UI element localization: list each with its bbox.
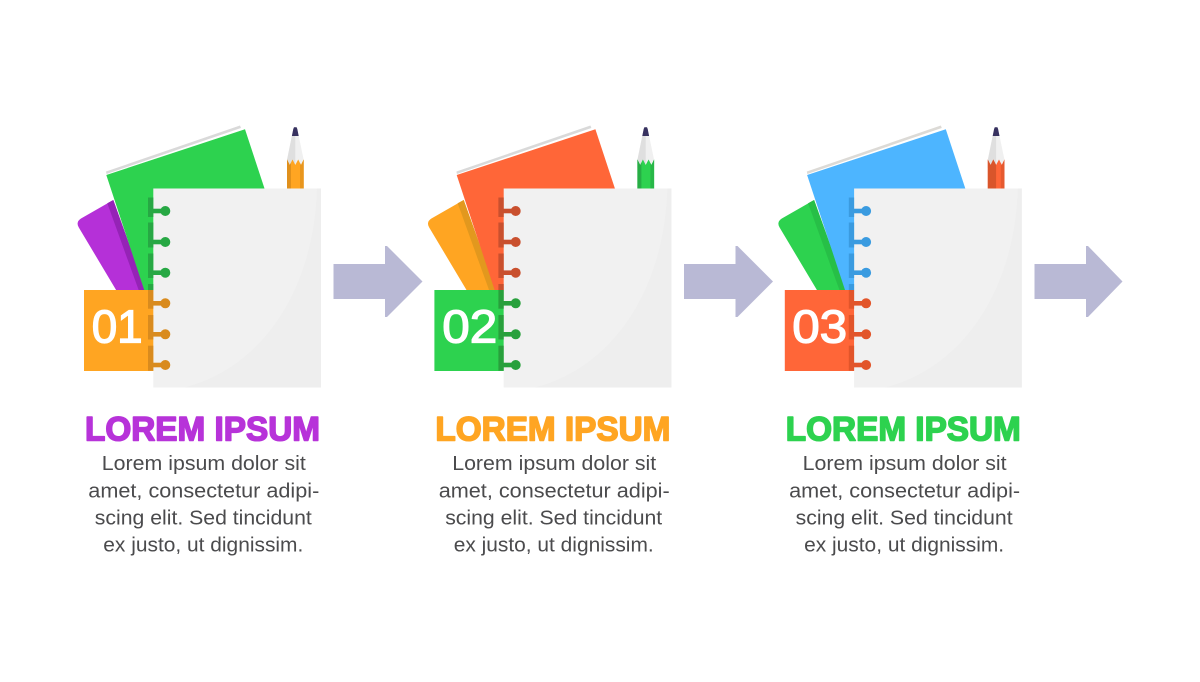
number 01: 01 (92, 300, 143, 352)
text block 02: amet, consectetur adipi- (439, 480, 670, 502)
heading 03: LOREM IPSUM (786, 411, 1021, 449)
arrow 1 (334, 246, 422, 317)
spiral rings (849, 198, 871, 371)
paper sheet (504, 188, 671, 388)
pencil (287, 127, 304, 188)
number tab (785, 290, 854, 371)
front book (456, 126, 615, 300)
panel: step 02 (428, 126, 671, 556)
heading 02: LOREM IPSUM (435, 411, 670, 449)
number tab (434, 290, 504, 371)
pencil (988, 127, 1004, 188)
arrow 3 (1034, 246, 1122, 317)
icon: notebook stack 02 (428, 126, 671, 388)
paper sheet (854, 188, 1022, 388)
spiral rings (498, 198, 521, 371)
text block 03: scing elit. Sed tincidunt (796, 507, 1013, 529)
heading 01: LOREM IPSUM (85, 411, 320, 449)
pencil (637, 127, 654, 188)
spiral rings (148, 198, 170, 371)
number 02: 02 (442, 300, 497, 352)
panel: step 01 (78, 126, 321, 556)
text block 02: scing elit. Sed tincidunt (445, 507, 663, 529)
back book (78, 200, 146, 291)
text block 01: amet, consectetur adipi- (88, 480, 319, 502)
text block 03: Lorem ipsum dolor sit (803, 453, 1007, 475)
back book (778, 200, 847, 291)
text block 03: amet, consectetur adipi- (789, 480, 1020, 502)
icon: notebook stack 01 (78, 126, 321, 388)
text block 02: Lorem ipsum dolor sit (452, 453, 657, 475)
text block 03: ex justo, ut dignissim. (804, 534, 1004, 556)
arrow 2 (684, 246, 773, 317)
text block 01 (88, 453, 319, 556)
number tab (84, 290, 154, 371)
text block 02: ex justo, ut dignissim. (454, 534, 654, 556)
text block 02 (439, 453, 670, 556)
text block 01: scing elit. Sed tincidunt (95, 507, 312, 529)
number 03: 03 (792, 300, 847, 352)
back book (428, 200, 496, 291)
front book (807, 126, 966, 300)
icon: notebook stack 03 (778, 126, 1022, 388)
front book (106, 126, 265, 300)
panel: step 03 (778, 126, 1022, 556)
text block 01: ex justo, ut dignissim. (103, 534, 303, 556)
paper sheet (153, 188, 321, 388)
text block 03 (789, 453, 1020, 556)
text block 01: Lorem ipsum dolor sit (102, 453, 306, 475)
